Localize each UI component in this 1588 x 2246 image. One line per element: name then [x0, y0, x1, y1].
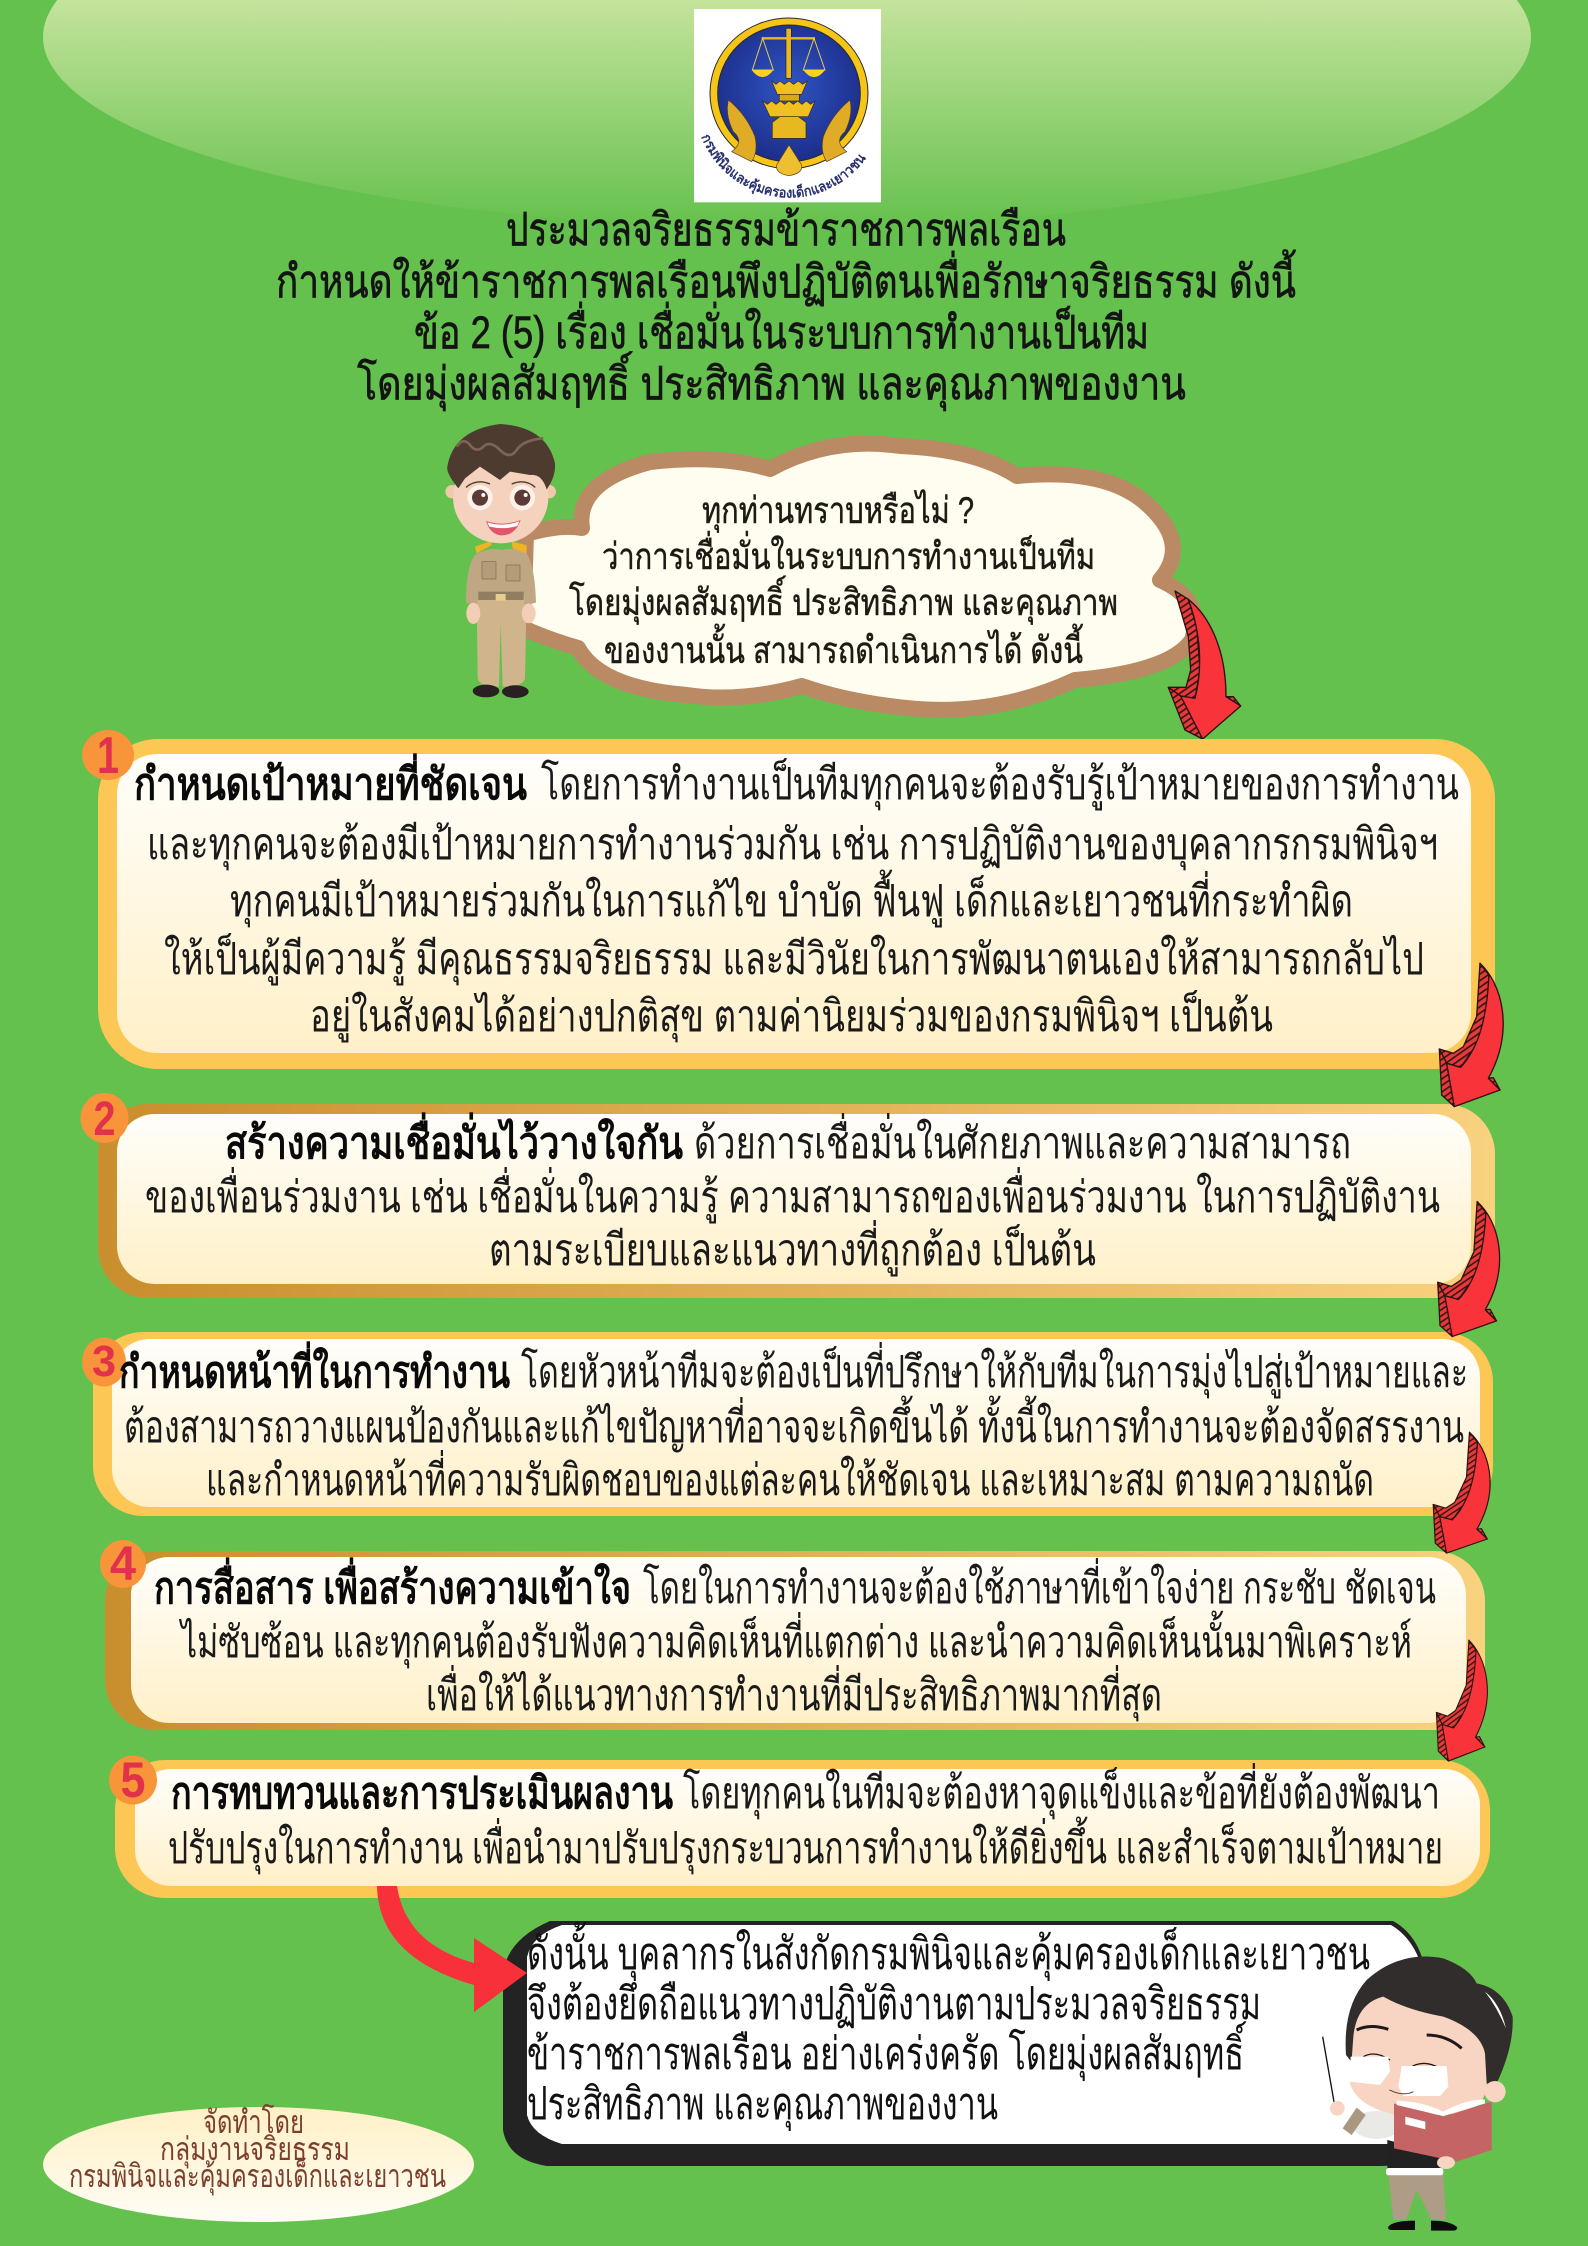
text: step 1 description — [134, 753, 1459, 1043]
panel: step 5 review and evaluation — [109, 1752, 1490, 1898]
title: ข้อ 2 (5) เรื่อง เชื่อมั่นในระบบการทำงานเป็นทีม — [414, 301, 1149, 358]
text: closing statement: ข้าราชการพลเรือน อย่างเคร่งครัด โดยมุ่งผลสัมฤทธิ์ — [527, 2020, 1247, 2081]
text: step 4 description — [154, 1557, 1436, 1722]
arrow: step 2 to step 3 — [1438, 1202, 1500, 1337]
text: step 2 description: ด้วยการเชื่อมั่นในศักยภาพและความสามารถ — [694, 1112, 1351, 1168]
credit ellipse: prepared by: จัดทำโดย — [203, 2104, 304, 2140]
badge: number 1: 1 — [97, 727, 119, 785]
panel: closing statement board — [503, 1921, 1428, 2166]
arrow: from cloud down to list — [1168, 591, 1241, 739]
credit ellipse: prepared by: กลุ่มงานจริยธรรม — [160, 2131, 350, 2169]
badge: number 3: 3 — [92, 1337, 116, 1386]
badge: number 5 — [109, 1752, 157, 1808]
arrow: step 4 to step 5 — [1436, 1640, 1487, 1761]
badge: number 2: 2 — [94, 1093, 116, 1146]
text: step 5 description — [168, 1762, 1443, 1875]
badge: number 2 — [80, 1093, 128, 1146]
decorative top ellipse — [43, 0, 1531, 227]
credit ellipse: prepared by: กรมพินิจและคุ้มครองเด็กและเยาวชน — [69, 2157, 446, 2196]
speech cloud with question: ของงานนั้น สามารถดำเนินการได้ ดังนี้ — [604, 623, 1084, 671]
logo: department seal — [694, 9, 881, 202]
character: teacher with book and pointer — [1323, 1957, 1513, 2231]
speech cloud with question: ว่าการเชื่อมั่นในระบบการทำงานเป็นทีม — [602, 530, 1095, 577]
text: closing statement: ประสิทธิภาพ และคุณภาพของงาน — [527, 2078, 998, 2131]
speech cloud with question — [523, 444, 1195, 710]
text: step 2 description: สร้างความเชื่อมั่นไว้วางใจกัน — [225, 1112, 683, 1168]
badge: number 4 — [100, 1538, 146, 1591]
title: โดยมุ่งผลสัมฤทธิ์ ประสิทธิภาพ และคุณภาพของงาน — [357, 350, 1186, 411]
arrow: step 1 to step 2 — [1439, 963, 1503, 1107]
badge: number 4: 4 — [110, 1538, 136, 1591]
credit ellipse: prepared by — [43, 2104, 474, 2222]
arrow: step 5 to closing statement — [377, 1886, 527, 2012]
panel: step 4 communication — [100, 1538, 1485, 1730]
text: step 5 description: การทบทวนและการประเมินผลงาน — [171, 1769, 673, 1818]
text: step 3 description: กำหนดหน้าที่ในการทำงาน — [119, 1341, 510, 1397]
title: ประมวลจริยธรรมข้าราชการพลเรือน — [506, 204, 1066, 255]
title: กำหนดให้ข้าราชการพลเรือนพึงปฏิบัติตนเพื่อรักษาจริยธรรม ดังนี้ — [276, 249, 1296, 307]
badge: number 1 — [82, 727, 134, 785]
arrow: step 3 to step 4 — [1433, 1432, 1490, 1553]
text: closing statement: จึงต้องยึดถือแนวทางปฏิบัติงานตามประมวลจริยธรรม — [527, 1978, 1261, 2029]
text: step 1 description: อยู่ในสังคมได้อย่างปกติสุข ตามค่านิยมร่วมของกรมพินิจฯ เป็นต้น — [310, 990, 1273, 1043]
text: step 3 description — [119, 1341, 1468, 1505]
logo: department seal: กรมพินิจและคุ้มครองเด็กและเยาวชน — [701, 134, 866, 198]
speech cloud with question: ทุกท่านทราบหรือไม่ ? — [702, 489, 974, 533]
panel: step 3 assign duties — [82, 1332, 1493, 1516]
speech cloud with question: โดยมุ่งผลสัมฤทธิ์ ประสิทธิภาพ และคุณภาพ — [569, 575, 1118, 625]
badge: number 3 — [82, 1337, 126, 1386]
text: step 2 description: ตามระเบียบและแนวทางที่ถูกต้อง เป็นต้น — [489, 1219, 1096, 1277]
text: closing statement — [527, 1921, 1370, 2131]
panel: step 2 trust — [80, 1093, 1495, 1298]
title — [276, 204, 1296, 411]
text: step 4 description: เพื่อให้ได้แนวทางการทำงานที่มีประสิทธิภาพมากที่สุด — [426, 1664, 1162, 1722]
character: civil servant in khaki uniform — [445, 424, 556, 698]
badge: number 5: 5 — [120, 1752, 146, 1808]
text: step 4 description: การสื่อสาร เพื่อสร้างความเข้าใจ — [154, 1557, 631, 1613]
text: step 2 description — [145, 1112, 1440, 1277]
text: step 1 description: กำหนดเป้าหมายที่ชัดเจน — [134, 753, 527, 809]
panel: step 1 clear goals — [82, 727, 1495, 1069]
